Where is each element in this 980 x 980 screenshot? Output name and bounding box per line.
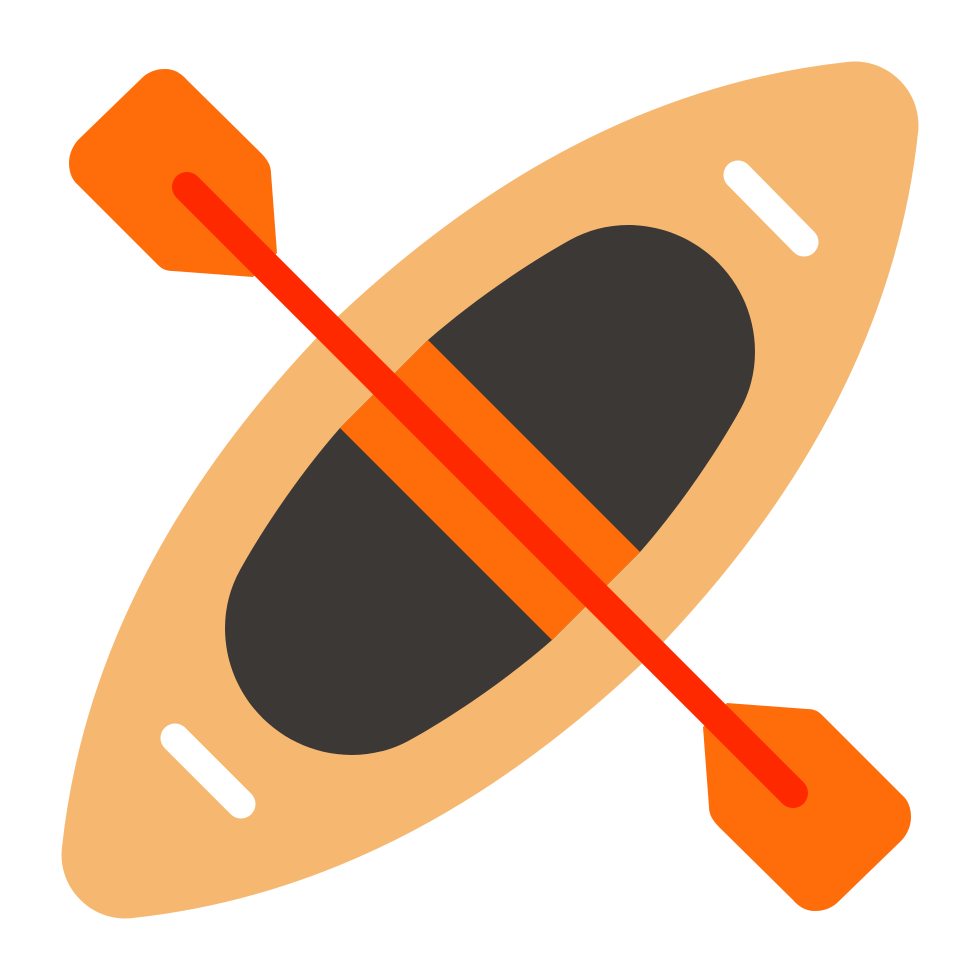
cockpit <box>225 225 755 755</box>
upper paddle blade <box>69 69 277 277</box>
front handle <box>738 175 804 242</box>
kayak hull <box>62 62 918 918</box>
paddle shaft <box>187 187 793 793</box>
rear handle <box>175 738 241 804</box>
lower paddle blade <box>703 703 911 911</box>
seat band <box>340 340 640 640</box>
